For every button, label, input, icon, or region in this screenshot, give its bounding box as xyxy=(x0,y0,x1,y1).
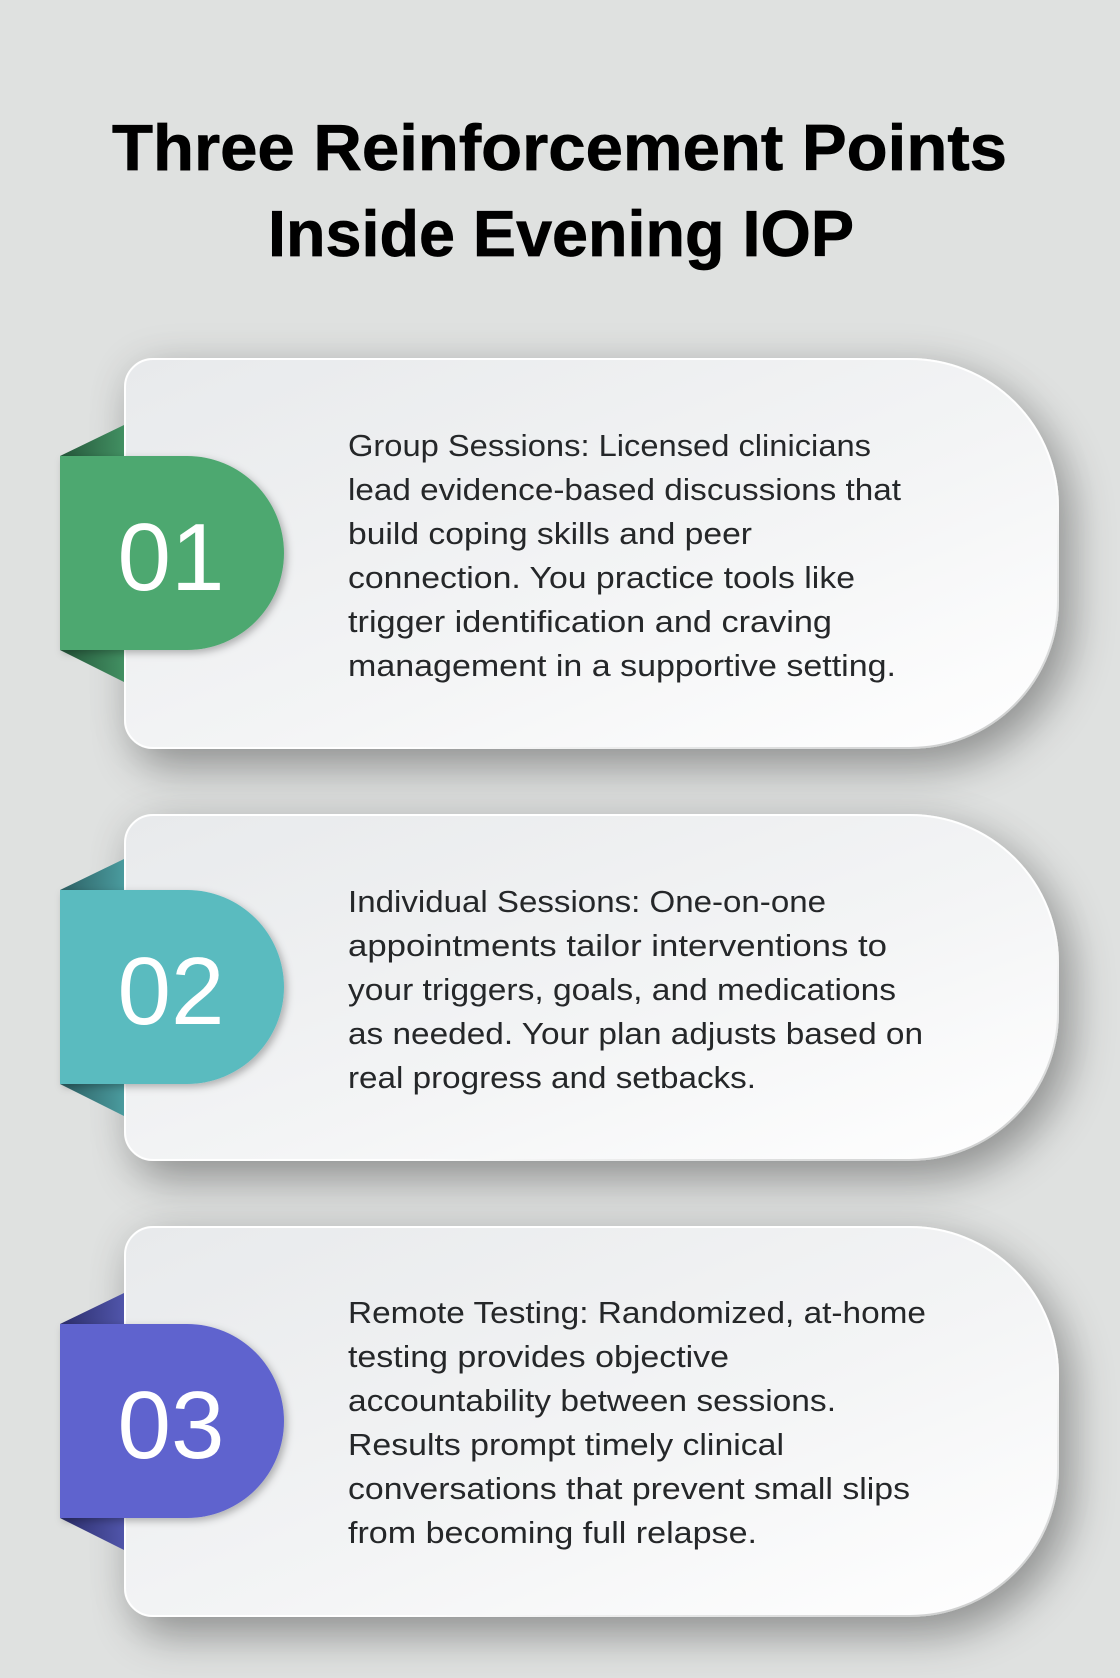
title xyxy=(112,111,1007,270)
text: individual sessions: as needed. Your plan adjusts based on xyxy=(348,1016,923,1051)
text: remote testing: from becoming full relapse. xyxy=(348,1515,757,1550)
text: remote testing xyxy=(348,1295,926,1550)
ribbon fold top 02 xyxy=(60,859,124,890)
text: individual sessions: appointments tailor interventions to xyxy=(348,928,887,963)
text: remote testing: testing provides objective xyxy=(348,1339,729,1374)
number tab 01 xyxy=(60,456,284,650)
number 03: 03 xyxy=(118,1372,224,1479)
text: individual sessions: Individual Sessions: One-on-one xyxy=(348,884,826,919)
text: group sessions xyxy=(348,428,901,683)
text: remote testing: conversations that prevent small slips xyxy=(348,1471,910,1506)
panel: step 02 individual sessions xyxy=(60,815,1058,1160)
text: individual sessions: real progress and setbacks. xyxy=(348,1060,756,1095)
panel: step 01 group sessions xyxy=(60,359,1058,748)
panel: step 03 remote testing xyxy=(60,1227,1058,1616)
number 02: 02 xyxy=(118,938,224,1045)
number tab 02 xyxy=(60,890,284,1084)
ribbon fold bottom 02 xyxy=(60,1084,124,1116)
text: group sessions: connection. You practice tools like xyxy=(348,560,855,595)
ribbon fold top 03 xyxy=(60,1293,124,1324)
card background 03 xyxy=(125,1227,1058,1616)
ribbon fold top 01 xyxy=(60,425,124,456)
ribbon fold bottom 01 xyxy=(60,650,124,682)
text: individual sessions: your triggers, goals, and medications xyxy=(348,972,896,1007)
text: group sessions: lead evidence-based discussions that xyxy=(348,472,901,507)
card background 02 xyxy=(125,815,1058,1160)
text: remote testing: accountability between sessions. xyxy=(348,1383,836,1418)
card background 01 xyxy=(125,359,1058,748)
text: group sessions: trigger identification and craving xyxy=(348,604,832,639)
number tab 03 xyxy=(60,1324,284,1518)
text: remote testing: Results prompt timely clinical xyxy=(348,1427,784,1462)
ribbon fold bottom 03 xyxy=(60,1518,124,1550)
text: group sessions: build coping skills and peer xyxy=(348,516,752,551)
number 01: 01 xyxy=(118,504,224,611)
text: group sessions: Group Sessions: Licensed clinicians xyxy=(348,428,871,463)
title: Three Reinforcement Points xyxy=(112,111,1007,184)
text: group sessions: management in a supportive setting. xyxy=(348,648,896,683)
text: remote testing: Remote Testing: Randomized, at-home xyxy=(348,1295,926,1330)
title: Inside Evening IOP xyxy=(268,197,854,270)
text: individual sessions xyxy=(348,884,923,1095)
